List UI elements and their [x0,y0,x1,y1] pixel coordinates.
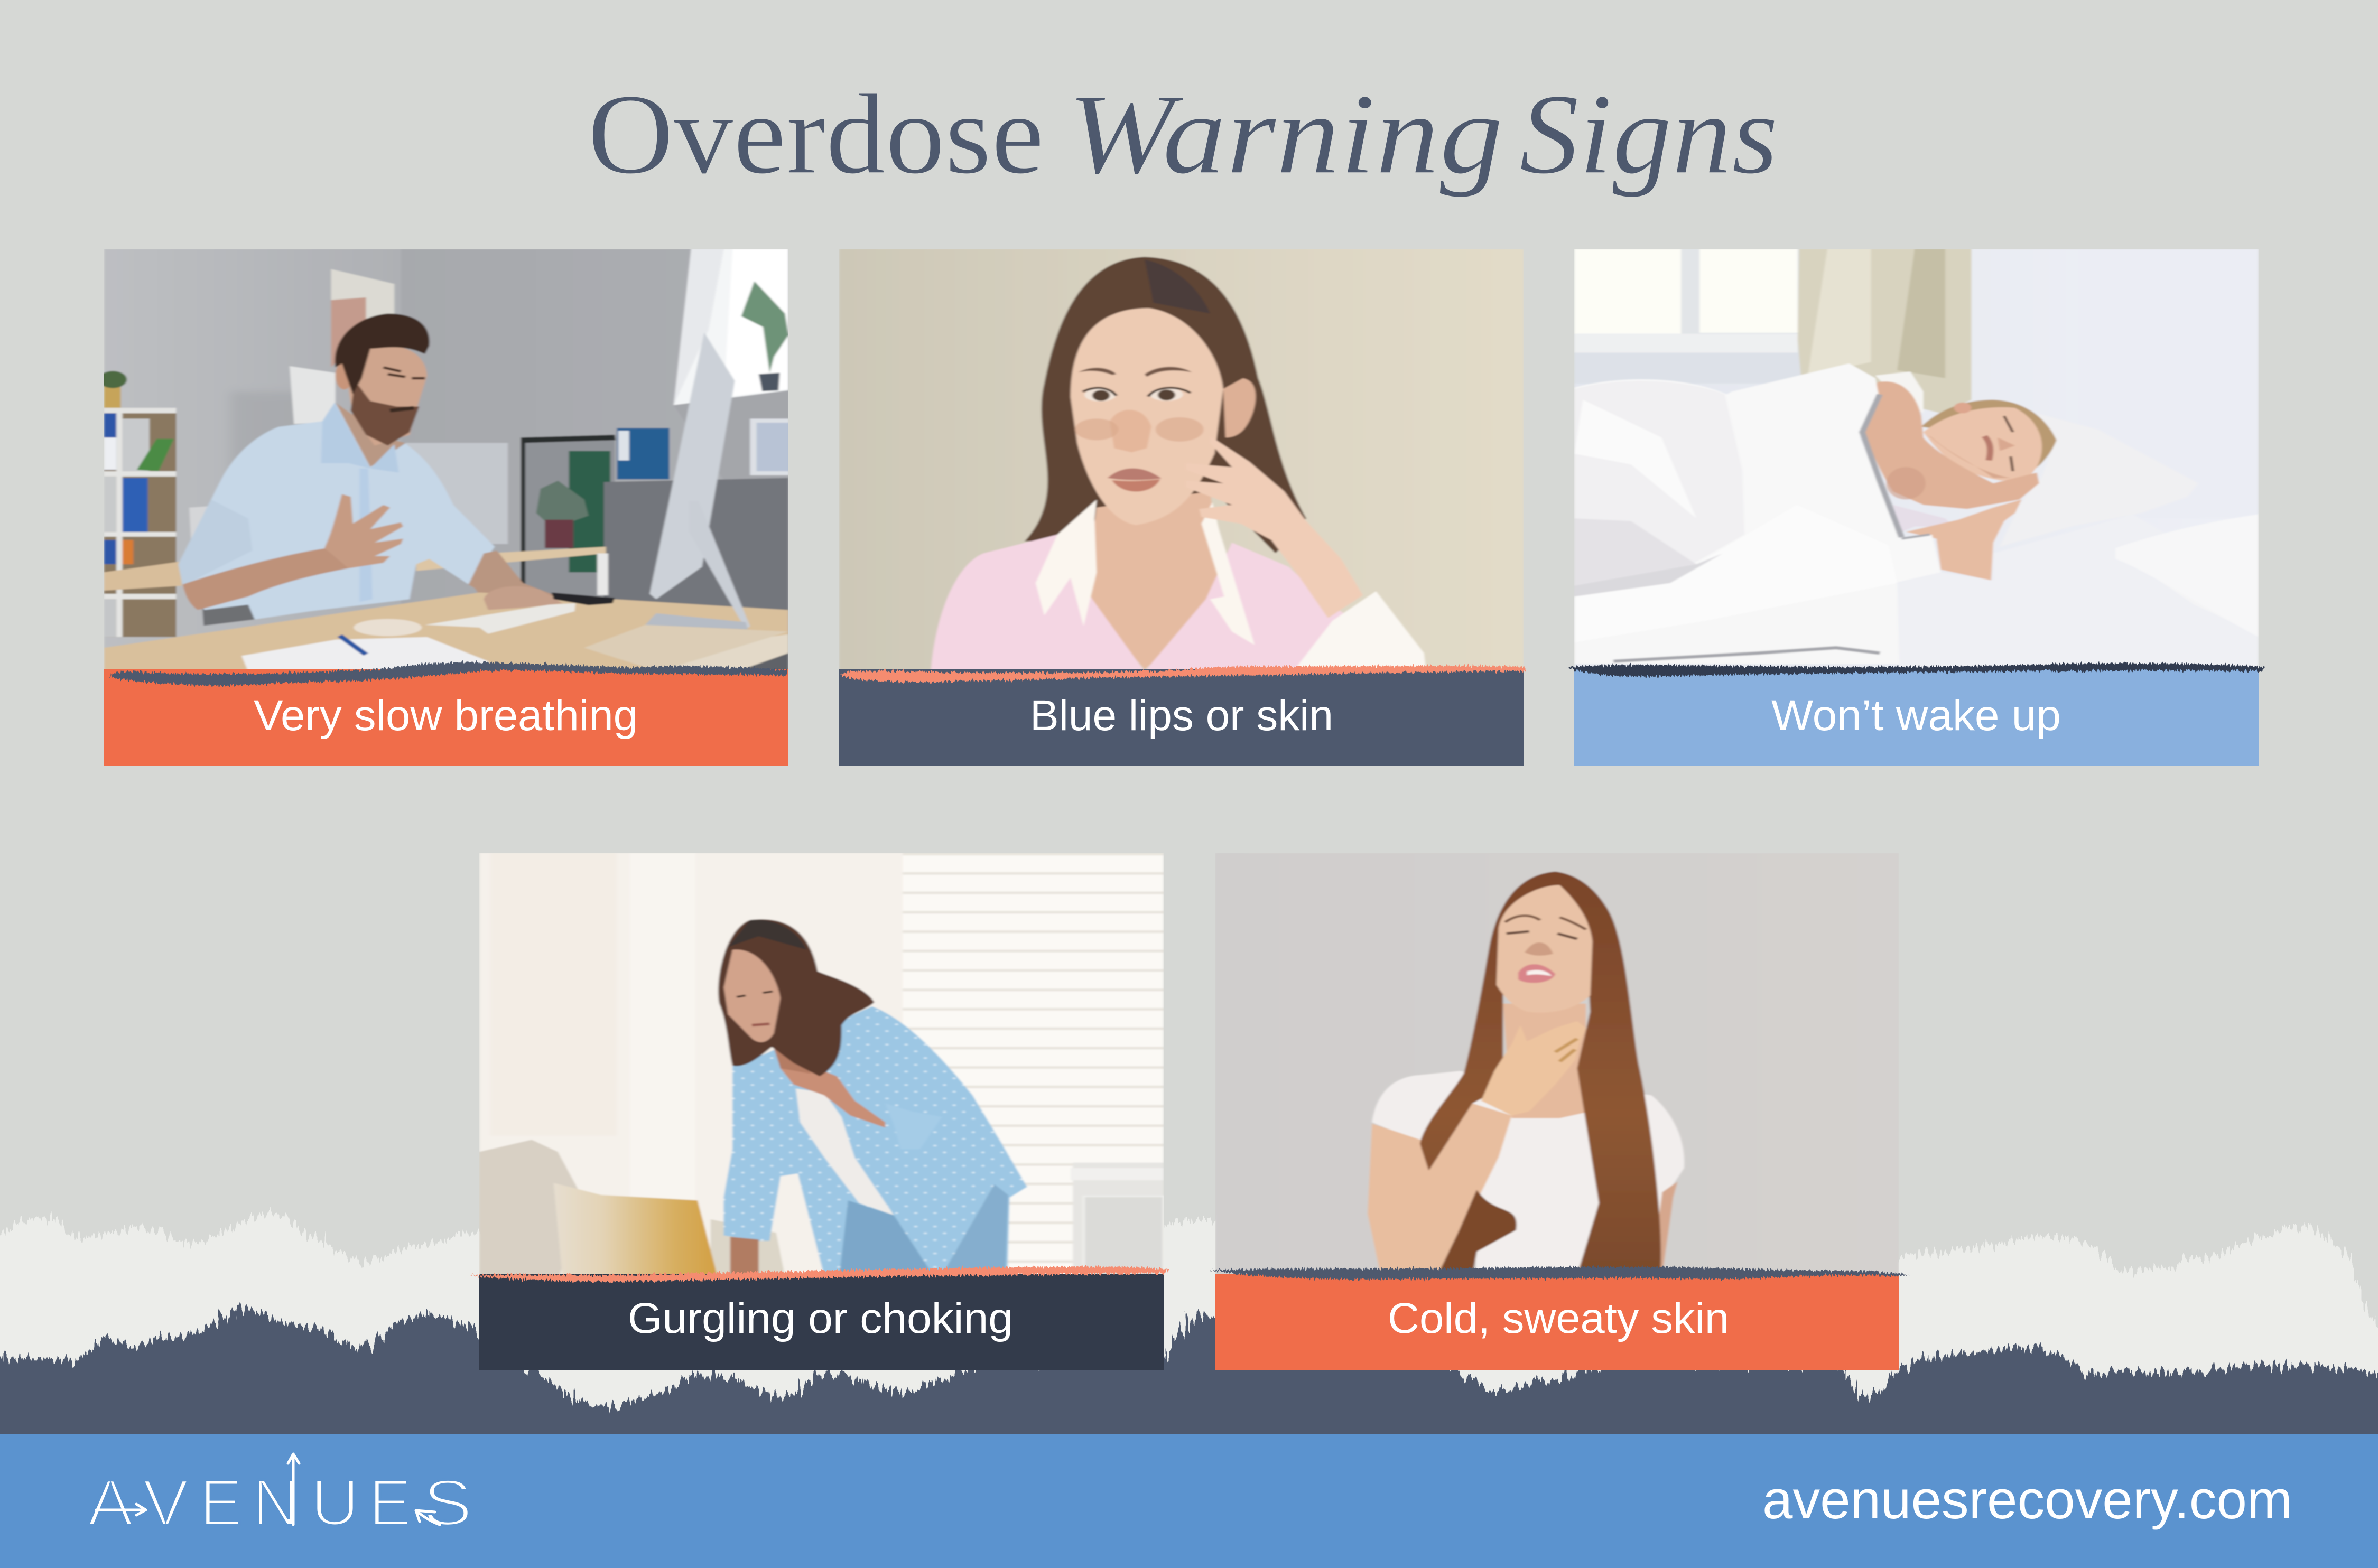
title: Signs [1519,71,1778,198]
panel: won't wake up [1567,249,2264,766]
footer bar [0,1434,2378,1568]
panel: blue lips or skin [839,249,1525,766]
logo: Avenues: N [253,1467,299,1539]
logo: Avenues: V [143,1467,189,1539]
caption bar [479,1274,1164,1370]
caption text: Blue lips or skin [1030,692,1333,740]
caption text: Won’t wake up [1771,692,2061,740]
torn paper band: light [0,1213,2378,1458]
title: Overdose [588,71,1044,198]
caption bar [1215,1274,1899,1370]
torn paper band: dark slate [0,1310,2378,1458]
panel: gurgling or choking [470,853,1168,1370]
torn strip [470,1267,1168,1282]
photo: woman bending over with hand on chest [479,853,1164,1274]
caption bar [839,669,1524,766]
logo: Avenues: A [88,1467,133,1539]
website url: avenuesrecovery.com [1762,1469,2292,1530]
torn strip [110,662,787,686]
torn strip [1210,1267,1909,1279]
caption text: Cold, sweaty skin [1388,1294,1729,1342]
torn strip [840,666,1525,682]
caption text: Very slow breathing [254,692,638,740]
photo: woman asleep in bed [1574,249,2259,669]
photo: woman holding throat [1215,853,1899,1274]
logo: Avenues: E [200,1467,242,1539]
logo: Avenues [88,1454,472,1539]
logo: Avenues: U [311,1467,359,1539]
panel: very slow breathing [99,249,794,766]
caption bar [1574,669,2259,766]
title [588,71,1778,198]
photo: woman touching freckled cheek [839,249,1523,669]
photo: man holding chest at desk [104,249,788,669]
logo: Avenues: S [423,1467,472,1539]
panel: cold, sweaty skin [1210,853,1909,1370]
torn strip [1567,664,2264,676]
caption text: Gurgling or choking [628,1294,1013,1342]
logo: Avenues: E [369,1467,411,1539]
caption bar [104,669,788,766]
title: Warning [1067,71,1503,198]
